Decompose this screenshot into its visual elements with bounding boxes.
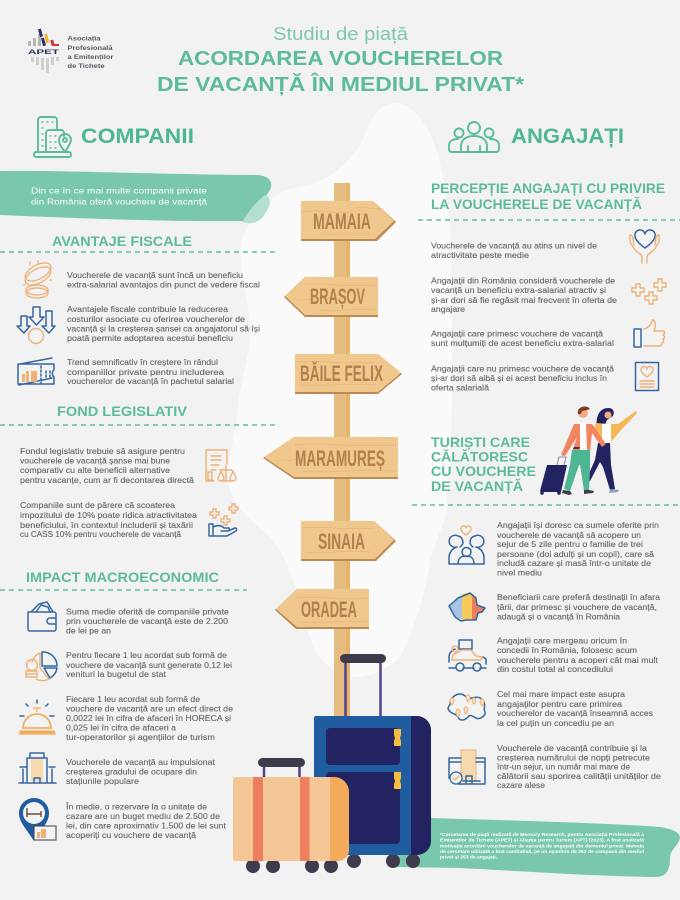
text: turisti 4 xyxy=(497,689,653,728)
text: avantaje 2 xyxy=(67,304,260,343)
text: turisti 4: voucherelor de vacanță înseamnă acces xyxy=(497,708,653,718)
text: impact 5: cazare are un buget mediu de 2.500 de xyxy=(66,811,220,821)
title: Studiu de piață xyxy=(273,23,409,44)
text: turisti 3: Angajații care mergeau oricum în xyxy=(497,636,627,646)
heading: angajati: ANGAJAȚI xyxy=(511,125,624,148)
text: impact 3: tur-operatorilor și agențiilor de turism xyxy=(66,732,215,742)
panel: footnote: privat și 253 de angajați. xyxy=(440,854,498,860)
heading: perceptie angajati: PERCEPȚIE ANGAJAȚI CU PRIVIRE xyxy=(431,180,665,196)
text: perceptie 2: și-ar dori să fie regăsit mai frecvent în oferta de xyxy=(431,295,617,305)
logo: de Tichete xyxy=(68,63,105,70)
text: perceptie 1 xyxy=(431,240,597,260)
text: turisti 4: Cel mai mare impact este asupra xyxy=(497,689,625,699)
text: impact 3: 0,025 lei în cifra de afaceri a xyxy=(66,722,176,732)
panel: footnote: motivația acordării voucherelor de vacanță de angajații din domeniul privat. Metoda xyxy=(440,844,644,850)
text: turisti 5: creșterea numărului de nopți petrecute xyxy=(497,752,650,762)
text: legislativ 1: voucherele de vacanță șanse mai bune xyxy=(20,456,170,466)
text: avantaje 1: Voucherele de vacanță sunt încă un beneficiu xyxy=(67,270,243,280)
illustration: blue suitcase xyxy=(314,654,431,868)
text: legislativ 1: Fondul legislativ trebuie să asigure pentru xyxy=(20,446,185,456)
text: legislativ 2: impozitului de 10% poate ridica atractivitatea xyxy=(20,510,197,520)
illustration: peach suitcase xyxy=(233,758,349,873)
text: perceptie 3: Angajații care primesc vouchere de vacanță xyxy=(431,328,603,338)
text: legislativ 1: pentru vacanțe, cum ar fi decontarea directă xyxy=(20,475,194,485)
icon: map with pins xyxy=(448,694,485,720)
rolling suitcase xyxy=(557,457,566,465)
text: impact 4: stațiunile populare xyxy=(66,776,139,786)
panel: footnote xyxy=(396,818,680,877)
heading: avantaje fiscale: AVANTAJE FISCALE xyxy=(52,233,192,249)
icon: coins xyxy=(22,259,54,298)
icon: family xyxy=(449,526,484,564)
text: perceptie 2: angajare xyxy=(431,304,465,314)
icon: arrows down coin xyxy=(17,307,55,344)
icon: buildings xyxy=(34,117,71,157)
text: avantaje 2: vacanță și la creșterea șansei ca angajatorul să își xyxy=(67,324,260,334)
text: perceptie 2: Angajații din România consideră voucherele de xyxy=(431,276,615,286)
background light blob xyxy=(228,103,452,677)
text: perceptie 3 xyxy=(431,328,614,348)
heading: perceptie angajati xyxy=(431,180,665,212)
heading: companii: COMPANII xyxy=(81,125,194,148)
text: turisti 3 xyxy=(497,636,659,674)
text: avantaje 2: costurilor asociate cu oferirea voucherelor de xyxy=(67,314,245,324)
text: avantaje 1: extra-salarial avantajos din punct de vedere fiscal xyxy=(67,280,260,290)
man xyxy=(561,407,606,495)
panel: intro companii xyxy=(0,171,271,223)
woman xyxy=(587,408,637,493)
logo: Profesională xyxy=(68,45,113,52)
text: impact 4: Voucherele de vacanță au impulsionat xyxy=(66,757,216,767)
text: turisti 5: cazare alese xyxy=(497,780,545,790)
text: impact 2: vouchere de vacanță sunt generate 0,12 lei xyxy=(66,660,232,670)
text: impact 4 xyxy=(66,757,216,786)
heading: perceptie angajati: LA VOUCHERELE DE VACANȚĂ xyxy=(431,196,642,212)
icon: ticket xyxy=(18,358,54,385)
icon: pluses xyxy=(632,279,666,304)
sign: Baile Felix: BĂILE FELIX xyxy=(300,361,383,386)
text: perceptie 4: și-ar dori să aibă și ei acest beneficiu inclus în xyxy=(431,373,607,383)
panel: intro companii: din România oferă vouchere de vacanță xyxy=(31,196,207,206)
text: turisti 1 xyxy=(497,520,659,578)
heading: impact macroeconomic: IMPACT MACROECONOMIC xyxy=(26,569,219,585)
sign: Mamaia: MAMAIA xyxy=(313,209,371,234)
text: perceptie 2 xyxy=(431,276,617,314)
heading: turisti: DE VACANȚĂ xyxy=(431,478,523,494)
text: turisti 5 xyxy=(496,743,661,790)
text: impact 4: creșterea gradului de ocupare din xyxy=(66,766,197,776)
sign: Mamaia xyxy=(301,201,396,241)
panel: footnote: de cercetare utilizată a fost cantitativă, pe un eșantion de 262 de companii din mediul xyxy=(440,849,645,855)
text: legislativ 1 xyxy=(20,446,194,485)
text: perceptie 4 xyxy=(431,364,614,392)
text: legislativ 2: beneficiului, în contextul includerii și taxării xyxy=(20,520,193,530)
text: impact 3: 0,0022 lei în cifra de afaceri în HORECA și xyxy=(66,713,231,723)
icon: people xyxy=(449,122,499,152)
text: avantaje 2: poată permite adoptarea acestui beneficiu xyxy=(67,333,233,343)
text: avantaje 2: Avantajele fiscale contribuie la reducerea xyxy=(67,304,228,314)
text: turisti 5: într-un sejur, un număr mai mare de xyxy=(496,762,630,772)
text: legislativ 1: comparativ cu alte beneficii alternative xyxy=(20,465,170,475)
panel: footnote: Emitenților de Tichete (APET) și Alianța pentru Turism (APT) (2023). A fost analizată xyxy=(440,838,644,844)
icon: law document xyxy=(206,450,236,481)
text: turisti 2: Beneficiarii care preferă destinații în afara xyxy=(497,592,660,602)
icon: thumb up xyxy=(634,320,664,347)
signpost xyxy=(263,183,402,717)
icon: car with luggage xyxy=(449,640,486,671)
text: perceptie 1: Voucherele de vacanță au atins un nivel de xyxy=(431,240,597,250)
text: avantaje 3: companiilor private pentru includerea xyxy=(67,367,224,377)
icon: hotel with check xyxy=(449,750,485,784)
sign: Brasov: BRAȘOV xyxy=(310,284,365,309)
text: perceptie 4: oferta salarială xyxy=(431,382,489,392)
sign: Maramures xyxy=(263,437,398,479)
text: turisti 5: Voucherele de vacanță contribuie și la xyxy=(497,743,647,753)
text: legislativ 2: Companiile sunt de părere că scoaterea xyxy=(20,500,175,510)
text: turisti 1: Angajații își doresc ca sumele oferite prin xyxy=(497,520,659,530)
text: perceptie 4: Angajații care nu primesc vouchere de vacanță xyxy=(431,364,614,374)
icon: hand with pluses xyxy=(209,504,238,536)
text: avantaje 3: Trend semnificativ în creștere în rândul xyxy=(67,357,218,367)
logo: APET xyxy=(28,49,59,56)
logo: Asociația xyxy=(68,36,101,42)
heading: turisti: TURIȘTI CARE xyxy=(431,434,530,450)
sign: Sinaia xyxy=(301,521,396,561)
text: turisti 4: la cel puțin un concediu pe an xyxy=(497,718,614,728)
heading: fond legislativ: FOND LEGISLATIV xyxy=(57,403,188,419)
icon: reception bell xyxy=(20,700,55,734)
panel: intro companii: Din ce în ce mai multe companii private xyxy=(31,186,207,196)
text: turisti 5: călătorii sau sporirea calității unităților de xyxy=(497,771,661,781)
sign: Brasov xyxy=(284,277,378,317)
text: turisti 2: țării, dar primesc și vouchere de vacanță, xyxy=(497,602,657,612)
text: turisti 1: persoane (doi adulți și un copil), care să xyxy=(497,549,654,559)
post xyxy=(334,183,350,717)
icon: romania map xyxy=(449,593,485,621)
text: turisti 1: sejur de 5 zile pentru o familie de trei xyxy=(497,539,643,549)
text: turisti 2 xyxy=(497,592,660,622)
text: impact 5: În medie, o rezervare la o unitate de xyxy=(65,802,207,812)
text: impact 1: prin voucherele de vacanță este de 2.200 xyxy=(66,616,228,626)
text: impact 3: vouchere de vacanță are un efect direct de xyxy=(66,704,233,714)
text: perceptie 3: sunt mulțumiți de acest beneficiu extra-salarial xyxy=(431,338,614,348)
icon: hotel xyxy=(19,753,56,783)
title xyxy=(157,23,524,96)
icon: heart in hands xyxy=(630,230,659,263)
text: turisti 1: voucherele de vacanță să acopere un xyxy=(497,530,641,540)
text: turisti 1: includă cazare și masă într-o unitate de xyxy=(497,558,651,568)
text: turisti 3: concedii în România, folosesc acum xyxy=(497,645,637,655)
panel: footnote: *Cercetarea de piață realizată de Mercury Research, pentru Asociația Profesională a xyxy=(440,832,644,838)
text: avantaje 3 xyxy=(67,357,234,386)
text: impact 3: Fiecare 1 leu acordat sub formă de xyxy=(66,694,200,704)
heading: turisti xyxy=(431,434,536,494)
icon: pie and coins xyxy=(26,652,57,681)
sign: Oradea xyxy=(275,589,369,629)
title: DE VACANȚĂ ÎN MEDIUL PRIVAT* xyxy=(157,72,524,96)
illustration: travellers xyxy=(540,407,637,495)
icon: wallet xyxy=(28,602,56,631)
text: impact 2: Pentru fiecare 1 leu acordat sub formă de xyxy=(66,650,227,660)
text: perceptie 2: vacanță un beneficiu extra-salarial atractiv și xyxy=(431,285,606,295)
text: impact 5: lei, din care aproximativ 1.500 de lei sunt xyxy=(66,820,227,830)
logo xyxy=(28,29,114,73)
heading: turisti: CU VOUCHERE xyxy=(431,463,536,479)
icon: location pin with bed and ticket xyxy=(19,798,56,841)
text: legislativ 2: cu CASS 10% pentru voucherele de vacanță xyxy=(20,529,181,539)
text: impact 1: de lei pe an xyxy=(66,626,111,636)
text: turisti 1: nivel mediu xyxy=(497,568,542,578)
sign: Baile Felix xyxy=(295,354,402,394)
text: impact 3 xyxy=(66,694,233,742)
text: impact 1: Suma medie oferită de companiile private xyxy=(66,606,229,616)
text: avantaje 3: voucherelor de vacanță în pachetul salarial xyxy=(67,376,234,386)
text: impact 2: venituri la bugetul de stat xyxy=(66,669,167,679)
text: impact 5 xyxy=(65,802,227,840)
heading: turisti: CĂLĂTORESC xyxy=(431,448,528,464)
logo: a Emitenților xyxy=(68,54,114,61)
text: impact 1 xyxy=(66,606,229,636)
text: turisti 3: voucherele pentru a acoperi cât mai mult xyxy=(497,655,659,665)
text: legislativ 2 xyxy=(20,500,197,539)
text: avantaje 1 xyxy=(67,270,260,290)
text: turisti 2: adaugă și o vacanță în România xyxy=(497,612,620,622)
title: ACORDAREA VOUCHERELOR xyxy=(178,48,504,70)
text: turisti 4: angajaților pentru care primirea xyxy=(497,699,622,709)
sign: Oradea: ORADEA xyxy=(301,597,357,622)
icon: document heart xyxy=(636,362,658,390)
sign: Maramures: MARAMUREȘ xyxy=(295,446,385,471)
text: perceptie 1: atractivitate peste medie xyxy=(431,250,529,260)
sign: Sinaia: SINAIA xyxy=(318,529,365,554)
text: turisti 3: din costul total al concediului xyxy=(497,664,613,674)
text: impact 5: acoperiți cu vouchere de vacanță xyxy=(66,830,196,840)
text: impact 2 xyxy=(66,650,232,679)
